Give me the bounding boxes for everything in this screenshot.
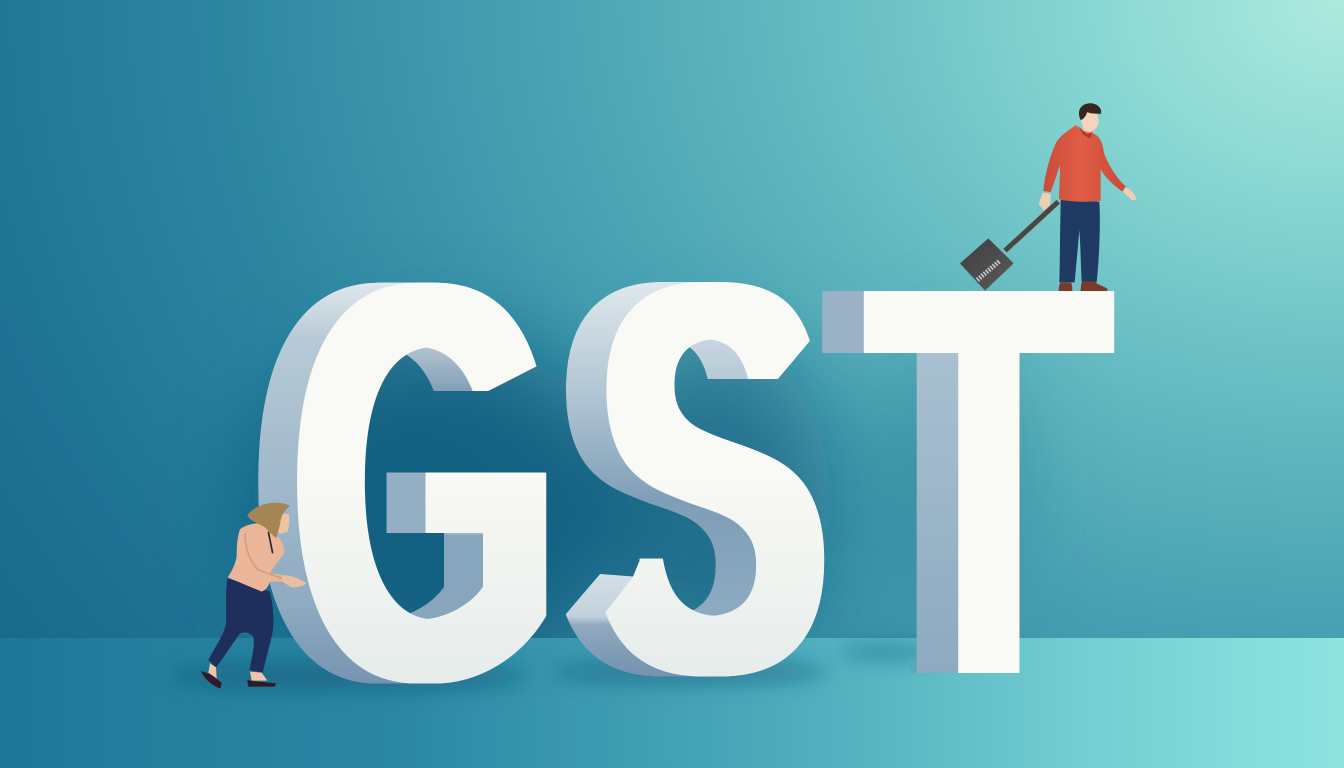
S lower terminal side (545, 558, 740, 678)
head (1081, 110, 1099, 131)
hair (247, 503, 290, 538)
T stem side (910, 353, 962, 673)
man with mallet standing on the T (960, 103, 1137, 291)
floor (0, 638, 1344, 768)
neck cord (268, 532, 273, 553)
woman leaning on the G (201, 503, 307, 688)
trousers (1059, 200, 1100, 282)
hands (1039, 187, 1137, 211)
G crossbar side (375, 465, 430, 535)
soft shadows on wall and floor (184, 304, 1038, 695)
arm fold (245, 533, 282, 578)
G outer side shading (245, 275, 555, 685)
ankles (208, 663, 267, 681)
hair (1079, 103, 1101, 120)
sweater (1043, 125, 1126, 202)
hand (282, 575, 307, 587)
G upper terminal underside (395, 340, 505, 400)
shoes (201, 671, 276, 688)
shoes (1059, 281, 1107, 291)
S body side shading (552, 275, 837, 625)
collar (1078, 126, 1093, 139)
mallet (960, 202, 1058, 291)
head (275, 513, 289, 534)
G spur side (400, 535, 490, 625)
T bar side (815, 285, 871, 355)
jacket (228, 523, 284, 592)
trousers (208, 578, 273, 673)
neck (1083, 125, 1094, 138)
